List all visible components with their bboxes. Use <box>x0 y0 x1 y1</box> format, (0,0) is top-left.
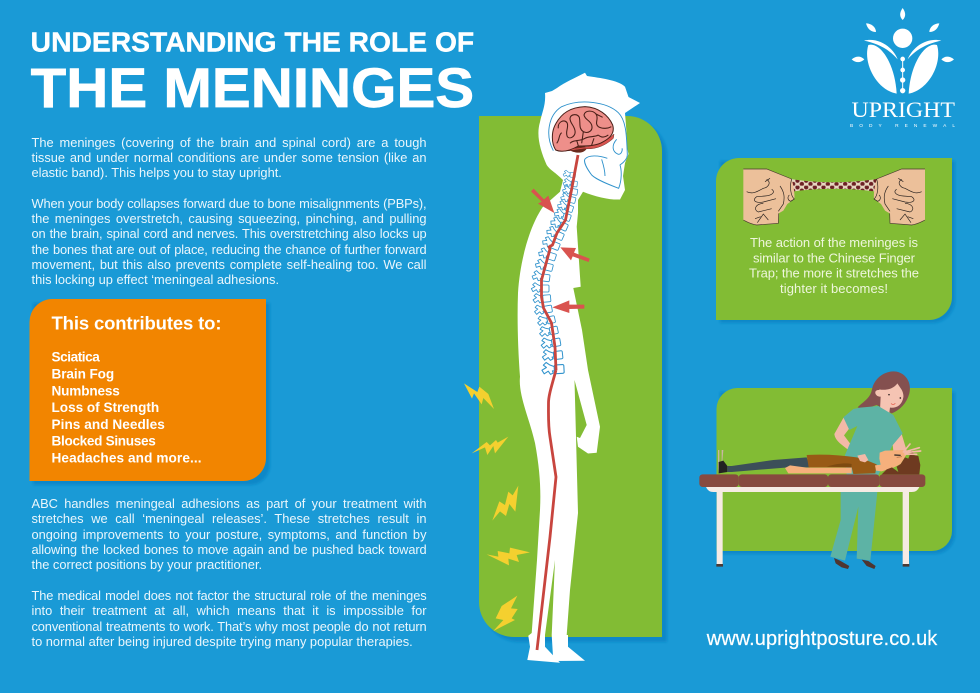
text: meningeal releases paragraph: ABC handles meningeal adhesions as part of your treatment with <box>32 496 426 511</box>
lightning bolts: nerve pain <box>464 383 530 631</box>
practitioner face <box>875 383 903 413</box>
illustration: practitioner treating patient on table <box>699 371 925 569</box>
text: forward collapse paragraph: movement, but this also prevents complete self-healing too. We call <box>32 257 426 272</box>
panel: treatment scene <box>699 371 955 569</box>
practitioner left arm <box>834 417 868 462</box>
finger trap caption <box>749 235 919 296</box>
symptoms list: Blocked Sinuses <box>52 434 156 448</box>
practitioner fingers on forehead <box>903 444 921 454</box>
text: forward collapse paragraph <box>32 196 426 287</box>
website url: www.uprightposture.co.uk <box>706 628 938 650</box>
patient head <box>875 450 907 471</box>
practitioner right arm <box>893 434 907 457</box>
symptoms list <box>52 350 202 465</box>
text: forward collapse paragraph: When your body collapses forward due to bone misalignments (PBPs), <box>32 196 426 210</box>
practitioner tunic <box>843 406 903 475</box>
illustration: hands pulling finger trap <box>743 169 925 225</box>
finger trap caption: tighter it becomes! <box>780 281 888 296</box>
text: forward collapse paragraph: the bones that are out of place, reducing the chance of further forward <box>32 242 426 257</box>
text: meningeal releases paragraph: the correct positions by your practitioner. <box>32 557 262 572</box>
text: intro paragraph: elastic band). This helps you to stay upright. <box>32 165 282 180</box>
logo wordmark: UPRIGHT <box>852 97 955 122</box>
panel: chinese finger trap <box>716 158 955 323</box>
contributes heading: This contributes to: <box>52 312 222 333</box>
skull outline <box>549 102 627 188</box>
practitioner hand on patient <box>857 454 868 462</box>
symptoms list: Loss of Strength <box>52 400 159 415</box>
spinal cord <box>537 155 578 650</box>
table rail <box>706 487 919 492</box>
text: medical model paragraph <box>32 588 426 649</box>
patient hair <box>882 450 920 474</box>
title: UNDERSTANDING THE ROLE OF <box>31 27 474 58</box>
text: intro paragraph: The meninges (covering of the brain and spinal cord) are a tough <box>32 134 426 150</box>
symptoms list: Pins and Needles <box>52 417 165 432</box>
arrow: lower back <box>552 300 584 313</box>
patient shirt <box>807 455 877 474</box>
arrow: mid back <box>560 247 590 262</box>
table cushions <box>699 474 925 487</box>
logo emblem <box>852 8 954 94</box>
figure: human side profile <box>518 73 640 663</box>
arrow: upper back <box>531 189 554 213</box>
panel: this contributes to <box>30 299 270 485</box>
text: medical model paragraph: The medical model does not factor the structural role of the meninges <box>32 588 426 603</box>
text: meningeal releases paragraph: allowing the locked bones to move again and be pushed back toward <box>32 542 426 557</box>
patient trousers <box>727 457 810 472</box>
text: medical model paragraph: into their treatment at all, which means that it is impossible for <box>32 603 426 618</box>
text: medical model paragraph: conventional treatments to work. That’s why most people do not return <box>32 619 426 634</box>
finger trap caption: Trap; the more it stretches the <box>749 266 919 281</box>
finger trap caption: The action of the meninges is <box>750 235 918 250</box>
table legs <box>717 492 909 565</box>
symptoms list: Headaches and more... <box>52 450 202 465</box>
text: meningeal releases paragraph <box>32 496 426 572</box>
logo: upright body renewal <box>850 8 955 129</box>
practitioner hair <box>858 371 910 413</box>
patient arm <box>785 465 852 473</box>
title: THE MENINGES <box>31 57 474 119</box>
text: meningeal releases paragraph: stretches we call ‘meningeal releases’. These stretches result in <box>32 511 426 526</box>
text: intro paragraph: tissue and under normal conditions are under some tension (like an <box>32 150 426 165</box>
practitioner trousers <box>830 492 877 561</box>
text: forward collapse paragraph: this locking up effect ‘meningeal adhesions. <box>32 272 279 287</box>
symptoms list: Sciatica <box>52 350 100 365</box>
text: forward collapse paragraph: on the brain, spinal cord and nerves. This overstretching also locks up <box>32 226 426 241</box>
spine vertebrae <box>531 170 578 375</box>
body silhouette <box>518 73 640 663</box>
finger trap caption: similar to the Chinese Finger <box>753 250 916 265</box>
symptoms list: Brain Fog <box>52 366 114 382</box>
patient feet <box>718 450 723 473</box>
text: meningeal releases paragraph: ongoing improvements to your posture, symptoms, and function by <box>32 527 426 542</box>
text: medical model paragraph: to normal after being injured despite trying many popular therapies. <box>32 634 413 649</box>
text: forward collapse paragraph: the meninges overstretch, causing squeezing, pinching, and pulling <box>32 211 426 226</box>
panel: main green backdrop <box>479 116 667 642</box>
brain <box>552 107 614 153</box>
text: intro paragraph <box>32 134 426 180</box>
title <box>31 27 474 119</box>
symptoms list: Numbness <box>52 383 120 398</box>
logo tagline: BODY RENEWAL <box>850 123 955 129</box>
